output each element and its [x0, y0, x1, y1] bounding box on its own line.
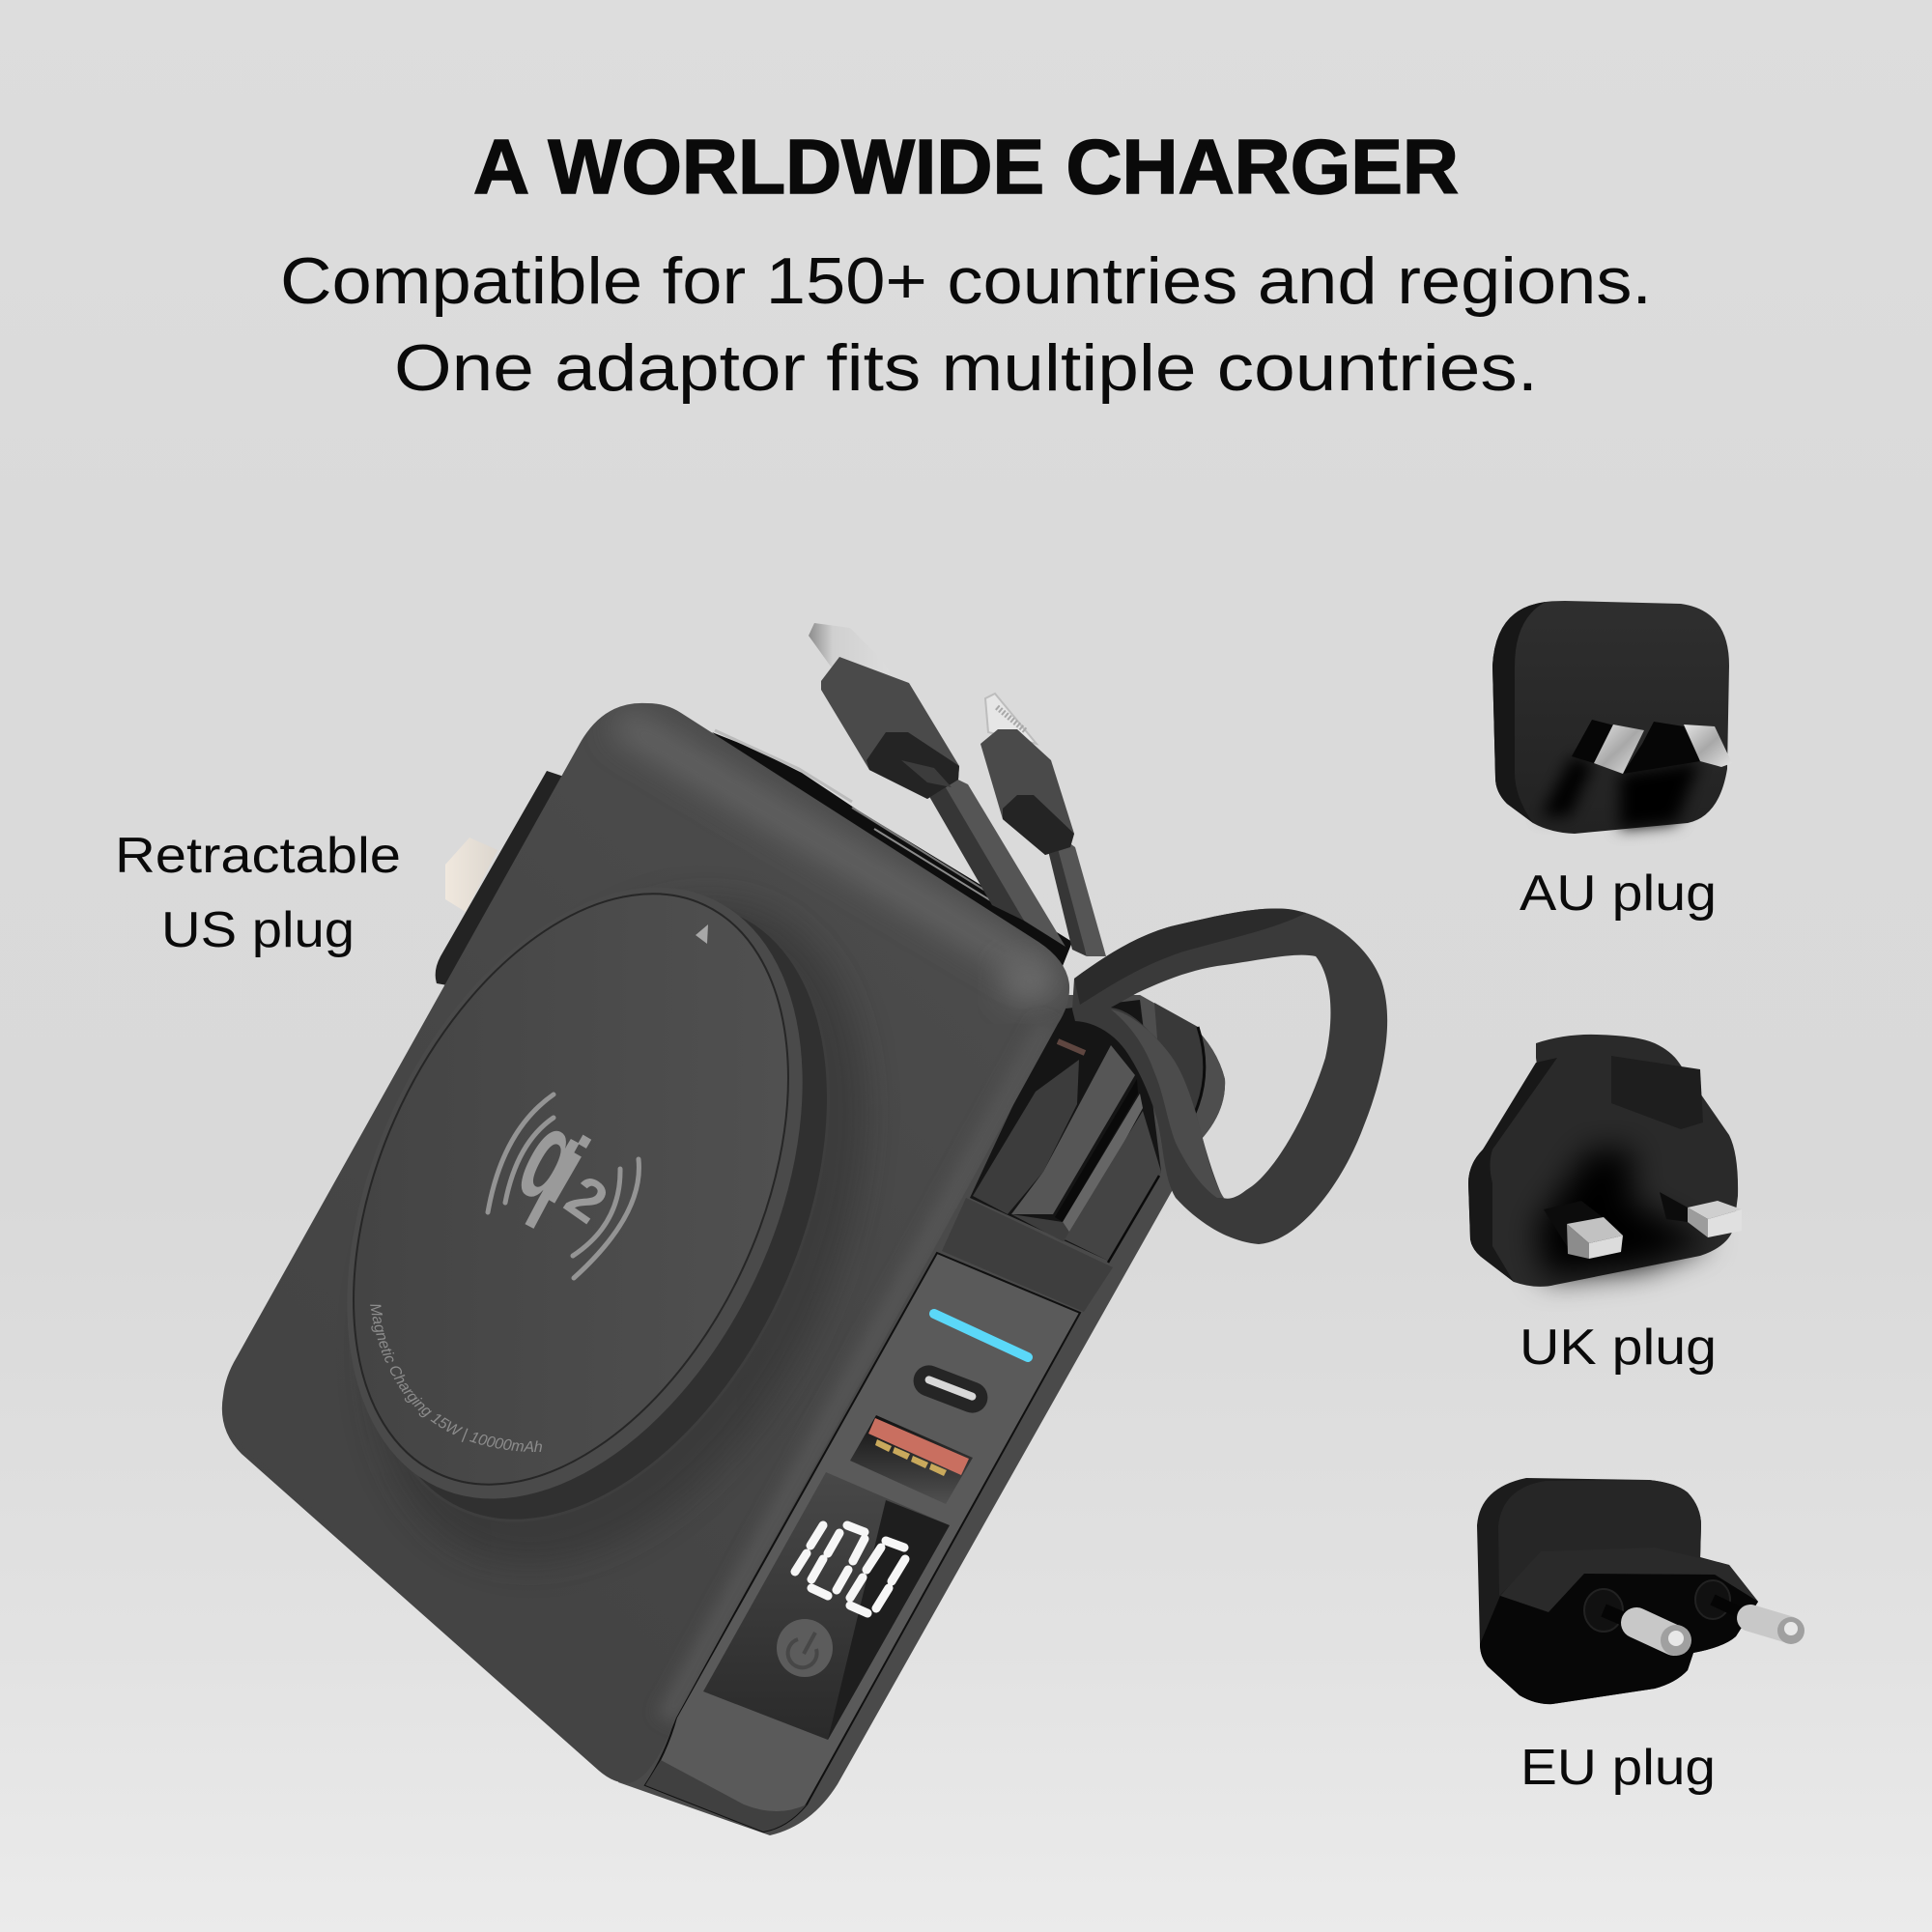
UK pin bases: [1544, 1192, 1688, 1246]
band above port panel: [942, 1198, 1113, 1312]
blue LED indicator: [934, 1314, 1028, 1357]
connector: Lightning: [980, 694, 1074, 855]
magnetic charging disc: [348, 893, 827, 1519]
UK plug: [1468, 1035, 1742, 1376]
UK plug shadow: [1536, 1150, 1710, 1277]
USB-C port: [909, 1361, 992, 1417]
AU plug pin shadows: [1541, 756, 1700, 829]
device side rim: [618, 995, 1225, 1835]
Qi2 logo: 2: [554, 1163, 619, 1236]
Qi2 logo: [488, 1083, 639, 1278]
AU plug label: AU plug: [1520, 866, 1717, 922]
subtitle: One adaptor fits multiple countries.: [394, 331, 1538, 405]
subtitle: Compatible for 150+ countries and regions.: [280, 244, 1652, 318]
EU pin sockets: [1584, 1580, 1730, 1632]
battery display: [703, 1472, 950, 1740]
UK plug side shade: [1468, 1058, 1557, 1282]
Qi2 logo: i: [530, 1118, 605, 1225]
port panel: [645, 1253, 1080, 1832]
flat cable: USB-C: [913, 768, 1065, 947]
Qi2 logo: q: [498, 1083, 606, 1233]
flat cable: Lightning: [1043, 831, 1106, 956]
USB-A port: [850, 1415, 973, 1504]
disc raised rim: [256, 814, 894, 1572]
alignment triangle: [696, 924, 708, 944]
label: retractable US plug: US plug: [161, 902, 355, 958]
UK plug label: UK plug: [1520, 1320, 1717, 1376]
EU pin left: [1604, 1610, 1691, 1656]
EU plug back face: [1498, 1480, 1701, 1596]
AU plug pin bases: [1572, 720, 1700, 774]
UK right pin: [1688, 1201, 1742, 1237]
power button: [777, 1619, 833, 1677]
AU plug right pin: [1684, 724, 1732, 767]
label: retractable US plug: [115, 828, 401, 958]
US plug base: [436, 771, 570, 987]
subtitle: [280, 244, 1652, 405]
EU pin right: [1713, 1600, 1804, 1644]
front face edge highlights: [398, 709, 1063, 1721]
AU plug side shade: [1492, 602, 1546, 823]
connector: USB-C: [809, 623, 959, 799]
disc base ring: [277, 829, 921, 1594]
disc caption: Magnetic Charging 15W | 10000mAh: [370, 1304, 542, 1452]
EU plug: [1477, 1478, 1804, 1796]
power bank product: [222, 623, 1387, 1835]
AU plug: [1492, 601, 1732, 922]
title: A WORLDWIDE CHARGER: [473, 124, 1459, 210]
AU plug left pin: [1594, 724, 1644, 774]
device front face: [222, 703, 1069, 1783]
EU plug front facet: [1500, 1548, 1758, 1612]
EU plug label: EU plug: [1520, 1740, 1716, 1796]
AU plug body: [1492, 601, 1729, 834]
cable cavity on top edge: [712, 730, 1072, 966]
EU plug front shade: [1480, 1574, 1758, 1704]
disc face: [266, 824, 876, 1554]
UK earth pin: [1611, 1056, 1703, 1129]
retractable US plug blade: [445, 838, 497, 912]
digits 100: [795, 1525, 905, 1613]
cable compartment: [970, 995, 1225, 1263]
label: retractable US plug: Retractable: [115, 828, 401, 884]
UK plug body: [1468, 1035, 1738, 1287]
UK left pin: [1567, 1217, 1623, 1259]
EU plug body: [1477, 1478, 1758, 1704]
cable loop: [1072, 908, 1387, 1244]
